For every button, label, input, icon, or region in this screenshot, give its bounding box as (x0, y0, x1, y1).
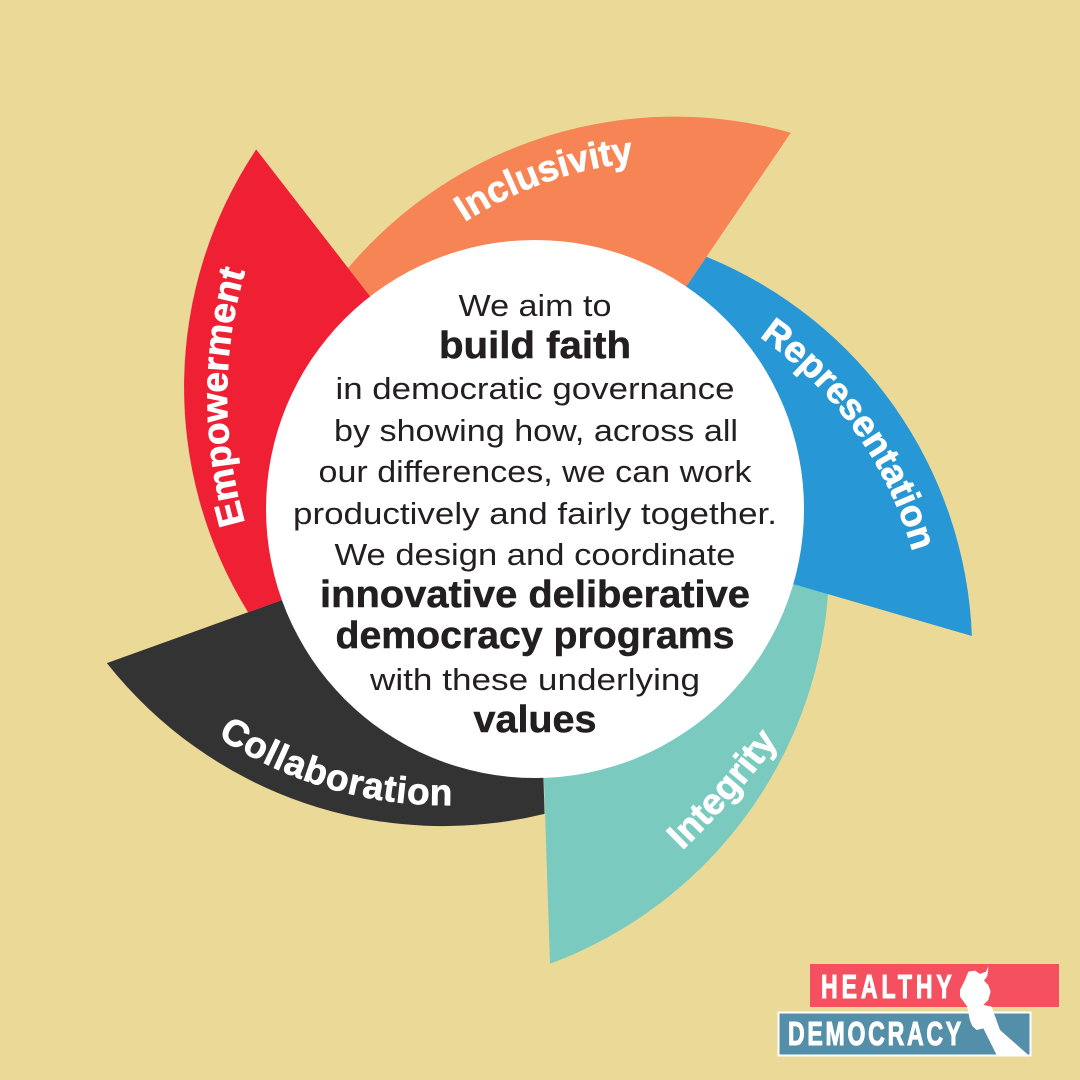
text block: mission statement: We aim to (458, 288, 612, 323)
petal: Representation (477, 210, 987, 752)
icon: torch arm silhouette (960, 966, 1028, 1055)
text block: mission statement (293, 288, 777, 741)
label: Inclusivity: Inclusivity (452, 141, 632, 222)
text block: mission statement: build faith (439, 325, 631, 367)
logo: Healthy Democracy: DEMOCRACY (788, 1016, 964, 1053)
text block: mission statement: by showing how, across all (334, 413, 738, 448)
label: Empowerment: Empowerment (206, 266, 245, 528)
panel: central circle (266, 240, 804, 778)
label: Collaboration: Collaboration (222, 720, 450, 806)
text block: mission statement: innovative deliberative (320, 574, 750, 616)
text block: mission statement: values (474, 699, 596, 741)
petal: Inclusivity (348, 117, 791, 509)
logo: Healthy Democracy (778, 964, 1059, 1056)
petal: Empowerment (104, 144, 614, 687)
text block: mission statement: our differences, we can work (318, 454, 752, 489)
petal: Integrity (328, 399, 917, 977)
text block: mission statement: We design and coordinate (334, 537, 736, 572)
label: Representation: Representation (760, 317, 930, 550)
label: Integrity: Integrity (666, 729, 777, 850)
text block: mission statement: with these underlying (369, 662, 700, 697)
logo: Healthy Democracy: HEALTHY (821, 969, 956, 1006)
petal: Collaboration (97, 359, 686, 936)
text block: mission statement: democracy programs (336, 615, 734, 657)
text block: mission statement: in democratic governance (336, 371, 734, 406)
text block: mission statement: productively and fairly together. (293, 496, 777, 531)
panel: values pinwheel (106, 116, 972, 964)
